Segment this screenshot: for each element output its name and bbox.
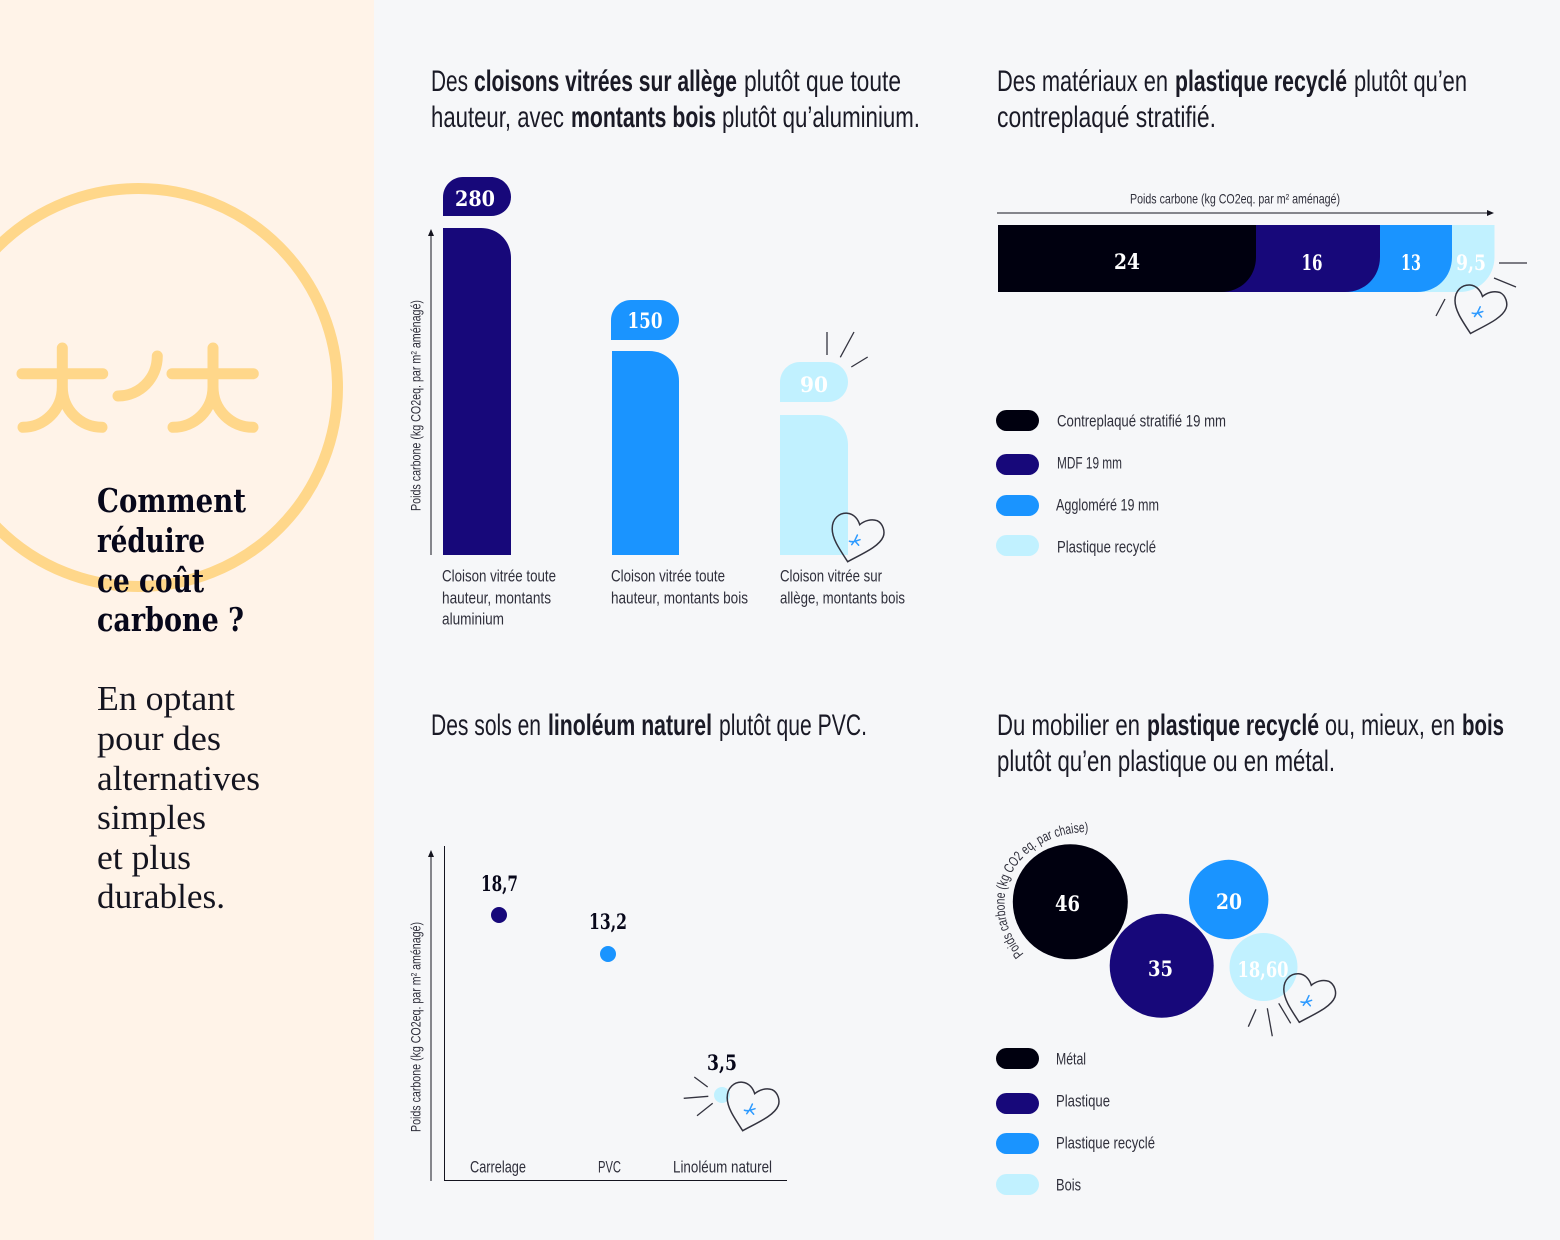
- heading: mobilier: plastique recyclé: [1147, 709, 1319, 742]
- point: Carrelage: 18,7: [481, 871, 518, 896]
- heading: cloisons: plutôt que toute: [744, 65, 901, 98]
- text: sidebar body: durables.: [97, 877, 225, 916]
- bar: 280: [443, 177, 511, 555]
- chart frame: [444, 846, 787, 1180]
- panel: left sidebar: [0, 0, 374, 1240]
- heading: mobilier: [997, 709, 1504, 778]
- axis: cloisons y axis: Poids carbone (kg CO2eq. par m² aménagé): [408, 300, 424, 511]
- heading: mobilier: Du mobilier en: [997, 709, 1140, 742]
- heading: sols: linoléum naturel: [548, 709, 712, 742]
- text: sidebar body: [97, 679, 260, 916]
- legend: mobilier: Bois: [1056, 1176, 1081, 1194]
- heading: matériaux: plastique recyclé: [1175, 65, 1347, 98]
- legend: matériaux: Contreplaqué stratifié 19 mm: [1057, 412, 1226, 430]
- axis: matériaux top axis: Poids carbone (kg CO2eq. par m² aménagé): [1130, 190, 1340, 206]
- heading: sols: plutôt que PVC.: [719, 709, 867, 742]
- text: sidebar body: alternatives: [97, 759, 260, 798]
- labels: bar categories: Cloison vitrée toute: [611, 566, 725, 586]
- heading: sidebar title: carbone ?: [97, 600, 244, 639]
- stacked bar: [998, 225, 1494, 292]
- heading: cloisons: montants bois: [571, 101, 716, 134]
- rays: bubble highlight: [1248, 1003, 1291, 1036]
- legend: matériaux: [996, 410, 1226, 556]
- legend: mobilier: [996, 1048, 1155, 1195]
- point: Carrelage: [470, 871, 526, 1176]
- bubble chart: 46: [1055, 891, 1080, 916]
- heading: sidebar title: Comment: [97, 481, 247, 520]
- bar: 280: 280: [455, 186, 495, 211]
- labels: bar categories: hauteur, montants bois: [611, 588, 748, 608]
- heading: sidebar title: ce coût: [97, 561, 205, 600]
- icon: heart: [832, 513, 884, 562]
- bar: 90: 90: [800, 372, 828, 397]
- labels: bar categories: hauteur, montants: [442, 588, 551, 608]
- bar: 90: [780, 362, 848, 555]
- legend: mobilier: Métal: [1056, 1050, 1086, 1068]
- bubble chart: 35: [1148, 956, 1173, 981]
- stacked bar: 9,5: [1456, 250, 1486, 275]
- legend: matériaux: Aggloméré 19 mm: [1056, 496, 1159, 514]
- legend: mobilier: Plastique recyclé: [1056, 1134, 1155, 1152]
- heading: mobilier: ou, mieux, en: [1325, 709, 1455, 742]
- heading: cloisons: plutôt qu’aluminium.: [722, 101, 920, 134]
- point: Carrelage: Carrelage: [470, 1158, 526, 1176]
- heading: matériaux: contreplaqué stratifié.: [997, 101, 1216, 134]
- text: sidebar body: pour des: [97, 719, 221, 758]
- heading: cloisons: cloisons vitrées sur allège: [474, 65, 737, 98]
- text: sidebar body: En optant: [97, 679, 235, 718]
- bar: 150: [611, 300, 679, 555]
- rays: bar highlight: [827, 332, 868, 367]
- heading: sols: Des sols en: [431, 709, 541, 742]
- heading: matériaux: plutôt qu’en: [1354, 65, 1467, 98]
- text: sidebar body: simples: [97, 798, 206, 837]
- stacked bar: 24: [1114, 249, 1140, 274]
- labels: bar categories: Cloison vitrée sur: [780, 566, 882, 586]
- rays: point highlight: [684, 1077, 713, 1116]
- point: Linoléum naturel: [673, 1050, 772, 1176]
- heading: matériaux: Des matériaux en: [997, 65, 1168, 98]
- point: Linoléum naturel: 3,5: [707, 1050, 737, 1075]
- bar: 150: 150: [628, 308, 662, 333]
- heading: cloisons: hauteur, avec: [431, 101, 564, 134]
- panel: cloisons: [408, 65, 920, 628]
- legend: mobilier: Plastique: [1056, 1092, 1110, 1110]
- text: sidebar body: et plus: [97, 838, 191, 877]
- point: PVC: [589, 909, 627, 1176]
- panel: mobilier: [995, 709, 1504, 1195]
- icon: heart: [1284, 974, 1336, 1022]
- rays: stacked bar highlight: [1436, 263, 1527, 316]
- heading: sidebar title: réduire: [97, 521, 205, 560]
- point: Linoléum naturel: Linoléum naturel: [673, 1158, 772, 1176]
- heading: mobilier: plutôt qu’en plastique ou en métal.: [997, 745, 1335, 778]
- bubble chart: [1013, 844, 1298, 1018]
- legend: matériaux: Plastique recyclé: [1057, 538, 1156, 556]
- axis label: curved: Poids carbone (kg CO2 eq. par chaise): [995, 822, 1088, 960]
- icon: large circle: [0, 188, 338, 586]
- labels: bar categories: Cloison vitrée toute: [442, 566, 556, 586]
- axis: sols y axis: Poids carbone (kg CO2eq. par m² aménagé): [408, 922, 424, 1132]
- heading: sidebar title: [97, 481, 247, 639]
- icon: heart: [1455, 285, 1507, 334]
- icon: person symbols: [22, 348, 253, 427]
- heading: cloisons: [431, 65, 920, 134]
- stacked bar: 16: [1302, 250, 1322, 275]
- heading: mobilier: bois: [1462, 709, 1504, 742]
- legend: matériaux: MDF 19 mm: [1057, 454, 1122, 472]
- heading: matériaux: [997, 65, 1467, 134]
- point: PVC: 13,2: [589, 909, 627, 934]
- labels: bar categories: [442, 566, 905, 628]
- icon: heart: [727, 1082, 779, 1131]
- panel: matériaux: [996, 65, 1527, 556]
- stacked bar: 13: [1401, 250, 1421, 275]
- bubble chart: 20: [1216, 889, 1242, 914]
- heading: cloisons: Des: [431, 65, 468, 98]
- panel: sols: [408, 709, 867, 1181]
- bubble chart: 18,60: [1238, 957, 1288, 982]
- labels: bar categories: allège, montants bois: [780, 588, 905, 608]
- heading: sols: [431, 709, 867, 742]
- labels: bar categories: aluminium: [442, 610, 504, 628]
- point: PVC: PVC: [598, 1158, 621, 1176]
